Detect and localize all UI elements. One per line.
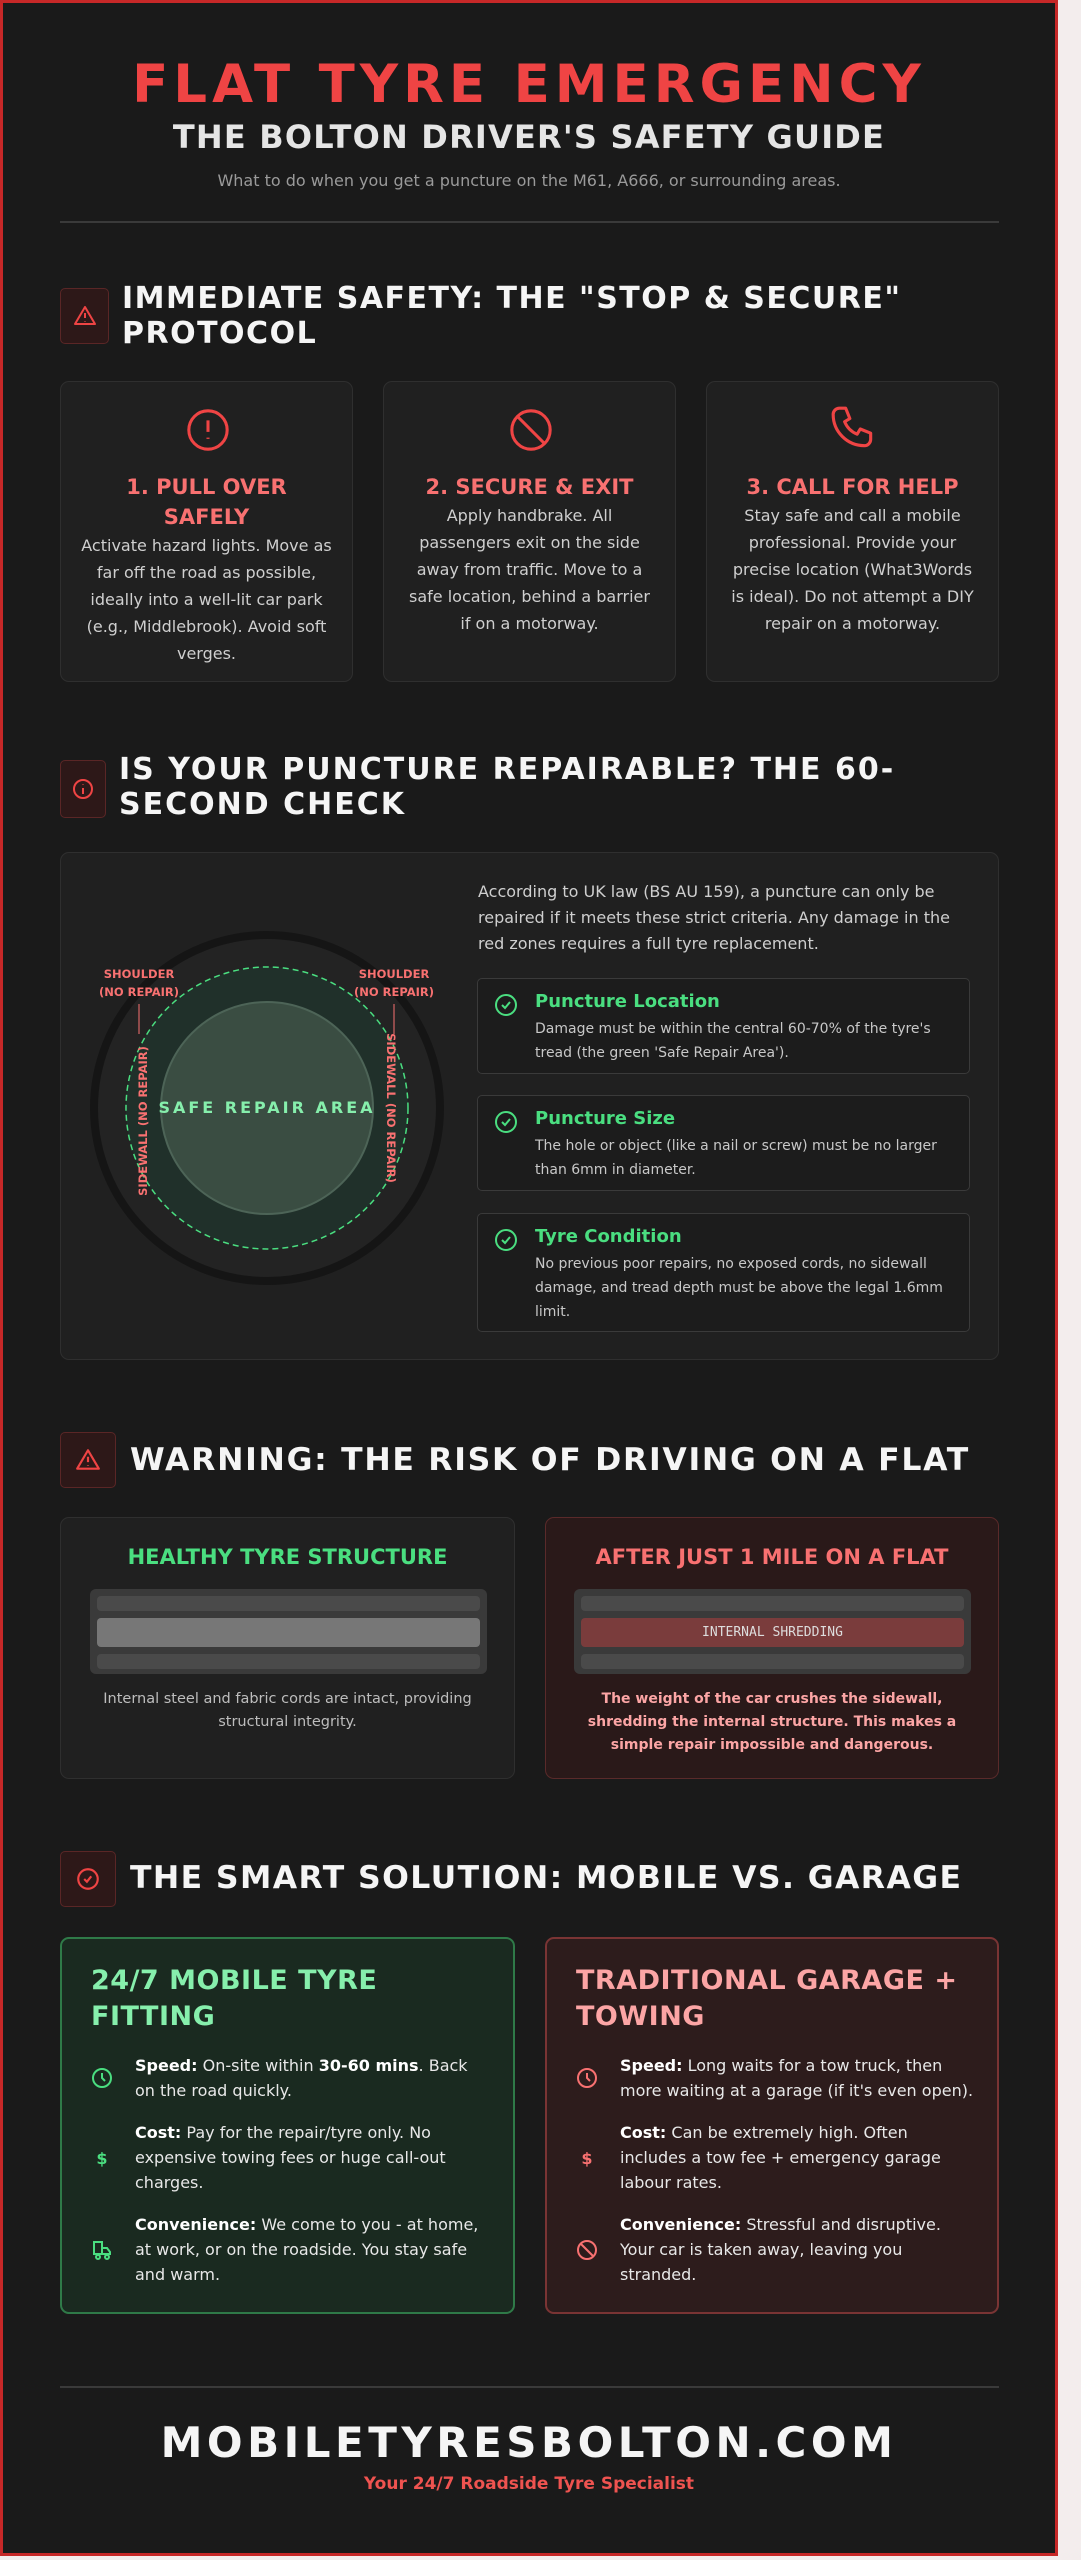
panel: repair check bbox=[60, 852, 999, 1360]
card 1: 1. PULL OVER bbox=[126, 475, 287, 499]
criterion: size: The hole or object (like a nail or screw) must be no larger than 6mm in diameter. bbox=[535, 1138, 937, 1178]
heading: immediate safety bbox=[122, 281, 902, 351]
card 1: Activate hazard lights. Move as far off the road as possible, ideally into a well-lit car park (e.g., Middlebrook). Avoid soft verges. bbox=[81, 536, 332, 663]
card: garage: Your car is taken away, leaving you bbox=[620, 2240, 902, 2259]
tyre diagram: SHOULDER bbox=[104, 967, 174, 981]
criterion: size bbox=[477, 1095, 970, 1191]
tyre diagram: (NO REPAIR) bbox=[99, 985, 179, 999]
tyre diagram: SAFE REPAIR AREA bbox=[158, 1098, 376, 1117]
icon: check section 4 bbox=[60, 1851, 116, 1907]
intro text: According to UK law (BS AU 159), a puncture can only be repaired if it meets these strict criteria. Any damage in the red zones requires a full tyre replacement. bbox=[478, 882, 950, 953]
card: garage: more waiting at a garage (if it's even open). bbox=[620, 2081, 973, 2100]
card: after flat: The weight of the car crushes the sidewall, shredding the internal structure. This makes a simple repair impossible and dangerous. bbox=[588, 1691, 956, 1753]
icon: alert circle bbox=[187, 409, 229, 451]
icon: ban bbox=[510, 409, 552, 451]
tyre diagram: SIDEWALL (NO REPAIR) bbox=[384, 1033, 398, 1183]
card 1 bbox=[60, 381, 353, 682]
footer tagline: Your 24/7 Roadside Tyre Specialist bbox=[364, 2474, 694, 2494]
criterion: location: Damage must be within the central 60-70% of the tyre's tread (the green 'Safe Repair Area'). bbox=[535, 1021, 931, 1061]
card: garage: TOWING bbox=[576, 2001, 705, 2032]
criterion: condition bbox=[477, 1213, 970, 1332]
card: mobile: and warm. bbox=[135, 2265, 220, 2284]
heading: repairable bbox=[119, 752, 895, 822]
card: garage: TRADITIONAL GARAGE + bbox=[576, 1965, 957, 1996]
card: garage: $ bbox=[581, 2148, 593, 2168]
card: garage bbox=[545, 1937, 999, 2314]
icon: phone bbox=[832, 406, 872, 448]
tyre diagram bbox=[90, 931, 444, 1285]
card: mobile: on the road quickly. bbox=[135, 2081, 292, 2100]
heading: smart solution: THE SMART SOLUTION: MOBILE VS. GARAGE bbox=[130, 1860, 962, 1896]
title: FLAT TYRE EMERGENCY bbox=[132, 54, 926, 115]
tagline: What to do when you get a puncture on the M61, A666, or surrounding areas. bbox=[217, 171, 841, 190]
footer url: MOBILETYRESBOLTON.COM bbox=[161, 2418, 897, 2467]
icon: warning section 3 bbox=[60, 1432, 116, 1488]
bars shredded: INTERNAL SHREDDING bbox=[702, 1625, 843, 1640]
icon: info section 2 bbox=[60, 760, 106, 818]
tyre diagram: SHOULDER bbox=[359, 967, 429, 981]
criterion: location: Puncture Location bbox=[535, 991, 720, 1012]
card: garage: Cost: Can be extremely high. Often bbox=[620, 2123, 908, 2142]
card: mobile: $ bbox=[96, 2148, 108, 2168]
card 2: 2. SECURE & EXIT bbox=[426, 475, 633, 499]
bars healthy bbox=[90, 1589, 487, 1674]
criterion: size: Puncture Size bbox=[535, 1108, 675, 1129]
card: mobile: expensive towing fees or huge call-out bbox=[135, 2148, 446, 2167]
card: mobile: Cost: Pay for the repair/tyre only. No bbox=[135, 2123, 431, 2142]
card 2: Apply handbrake. All passengers exit on the side away from traffic. Move to a safe location, behind a barrier if on a motorway. bbox=[409, 506, 650, 633]
criterion: location bbox=[477, 978, 970, 1074]
card: healthy: Internal steel and fabric cords are intact, providing structural integrity. bbox=[103, 1691, 472, 1730]
icon: warning section 1 bbox=[60, 288, 109, 344]
card: garage: Convenience: Stressful and disruptive. bbox=[620, 2215, 941, 2234]
heading: repairable: IS YOUR PUNCTURE REPAIRABLE? THE 60- bbox=[119, 752, 895, 787]
card 3 bbox=[706, 381, 999, 682]
card: garage: labour rates. bbox=[620, 2173, 722, 2192]
card: mobile: 24/7 MOBILE TYRE bbox=[91, 1965, 377, 1996]
heading: immediate safety: PROTOCOL bbox=[122, 316, 317, 351]
card: mobile: Speed: On-site within 30-60 mins. Back bbox=[135, 2056, 468, 2075]
card: garage: Speed: Long waits for a tow truck, then bbox=[620, 2056, 942, 2075]
tyre diagram: (NO REPAIR) bbox=[354, 985, 434, 999]
card: garage: includes a tow fee + emergency garage bbox=[620, 2148, 941, 2167]
card: mobile bbox=[60, 1937, 515, 2314]
card: healthy: HEALTHY TYRE STRUCTURE bbox=[128, 1545, 447, 1569]
card: mobile: charges. bbox=[135, 2173, 203, 2192]
card: after flat: AFTER JUST 1 MILE ON A FLAT bbox=[595, 1545, 949, 1569]
card: mobile: Convenience: We come to you - at home, bbox=[135, 2215, 478, 2234]
card 1: SAFELY bbox=[164, 505, 249, 529]
card: healthy bbox=[60, 1517, 515, 1779]
heading: repairable: SECOND CHECK bbox=[119, 787, 406, 822]
criterion: condition: Tyre Condition bbox=[535, 1226, 682, 1247]
criterion: condition: No previous poor repairs, no exposed cords, no sidewall damage, and tread depth must be above the legal 1.6mm limit. bbox=[535, 1256, 943, 1320]
card: garage: stranded. bbox=[620, 2265, 696, 2284]
card: after flat bbox=[545, 1517, 999, 1779]
bars shredded bbox=[574, 1589, 971, 1674]
card 3: Stay safe and call a mobile professional. Provide your precise location (What3Words is ideal). Do not attempt a DIY repair on a motorway. bbox=[731, 506, 974, 633]
card: mobile: at work, or on the roadside. You stay safe bbox=[135, 2240, 467, 2259]
subtitle: THE BOLTON DRIVER'S SAFETY GUIDE bbox=[173, 118, 885, 156]
card 2 bbox=[383, 381, 676, 682]
heading: warning: WARNING: THE RISK OF DRIVING ON A FLAT bbox=[130, 1442, 970, 1478]
heading: immediate safety: IMMEDIATE SAFETY: THE "STOP & SECURE" bbox=[122, 281, 902, 316]
card: mobile: FITTING bbox=[91, 2001, 215, 2032]
tyre diagram: SIDEWALL (NO REPAIR) bbox=[136, 1046, 150, 1196]
card 3: 3. CALL FOR HELP bbox=[746, 475, 958, 499]
